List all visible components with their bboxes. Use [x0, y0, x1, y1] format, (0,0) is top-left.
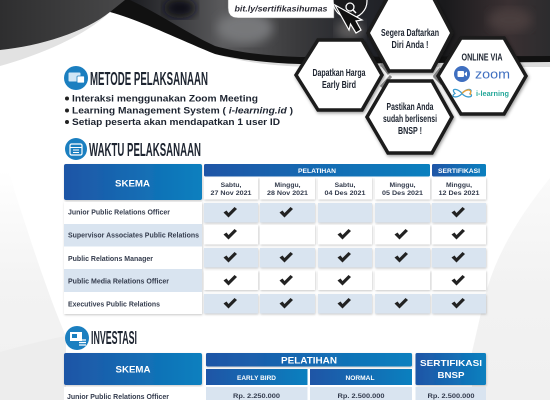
- icon: magnifier and cursor: [333, 0, 367, 33]
- price row: Rp. 2.250.000: [233, 393, 280, 400]
- hexagon: Early Bird: Dapatkan Harga: [312, 67, 366, 79]
- normal header: [310, 369, 412, 385]
- skema column: Public Relations Manager: [68, 256, 153, 263]
- skema column: [64, 164, 202, 314]
- pelatihan header: PELATIHAN: [281, 356, 337, 366]
- date cells: Minggu,: [389, 182, 416, 189]
- date cells: 28 Nov 2021: [267, 190, 308, 197]
- date cells: 12 Des 2021: [438, 190, 480, 197]
- date cells: Sabtu,: [221, 182, 241, 189]
- date cells: Minggu,: [446, 182, 472, 189]
- background: light grey shapes: [0, 170, 550, 400]
- icon: investment screen: [65, 326, 89, 350]
- hexagon: online via: [438, 38, 526, 114]
- hexagon: BNSP: sudah berlisensi: [383, 113, 437, 125]
- hexagon: Early Bird: [296, 40, 382, 110]
- bullet list: Interaksi menggunakan Zoom Meeting: [72, 94, 258, 104]
- normal header: NORMAL: [346, 375, 375, 382]
- pelatihan header: PELATIHAN: [298, 168, 336, 175]
- pelatihan header: [204, 164, 430, 176]
- hexagon: Segera Daftarkan: [368, 0, 452, 71]
- hexagon: BNSP: [367, 81, 452, 153]
- hexagon: BNSP: Pastikan Anda: [386, 101, 434, 113]
- date cells: 04 Des 2021: [324, 190, 366, 197]
- hexagon: BNSP: BNSP !: [398, 125, 422, 137]
- heading: waktu pelaksanaan: WAKTU PELAKSANAAN: [89, 140, 201, 160]
- heading: investasi: [65, 326, 137, 350]
- early bird header: EARLY BIRD: [237, 375, 276, 382]
- skema column: Supervisor Associates Public Relations: [68, 232, 199, 240]
- skema column: Executives Public Relations: [68, 302, 160, 308]
- skema header: [64, 353, 202, 385]
- heading: metode pelaksanaan: METODE PELAKSANAAN: [90, 69, 208, 89]
- bullet list: [65, 94, 293, 128]
- check marks: [224, 207, 465, 308]
- icon: zoom logo: zoom: [475, 66, 510, 82]
- text: INVESTASI: [91, 328, 137, 348]
- heading: waktu pelaksanaan: [65, 138, 201, 160]
- sertifikasi bnsp header: BNSP: [438, 370, 465, 380]
- skema column: Public Media Relations Officer: [68, 278, 169, 286]
- hexagon: Early Bird: Early Bird: [322, 79, 356, 91]
- icon: monitor: [64, 66, 88, 90]
- header band: photo and dark curves: [0, 0, 550, 67]
- date cells: 05 Des 2021: [382, 190, 423, 197]
- heading: metode pelaksanaan: [64, 66, 208, 90]
- price row: Rp. 2.500.000: [338, 393, 385, 400]
- price row: [64, 387, 486, 400]
- icon: calendar: [65, 138, 87, 160]
- skema column: SKEMA: [115, 178, 150, 190]
- pelatihan header: [206, 353, 412, 366]
- hexagon: online via: ONLINE VIA: [462, 52, 503, 64]
- connector lines between hexagons: [381, 64, 442, 87]
- schedule cells: [204, 203, 486, 314]
- sertifikasi header: SERTIFIKASI: [438, 168, 480, 175]
- hexagon: Segera Daftarkan: Segera Daftarkan: [381, 27, 439, 39]
- date cells: Minggu,: [274, 182, 301, 189]
- url pill: [228, 0, 334, 18]
- url pill: bit.ly/sertifikasihumas: [234, 4, 328, 14]
- date cells: [204, 178, 486, 200]
- schedule table: [64, 164, 486, 314]
- early bird header: [206, 369, 308, 385]
- skema column: Junior Public Relations Officer: [68, 210, 170, 216]
- sertifikasi bnsp header: SERTIFIKASI: [420, 358, 482, 368]
- bullet list: Learning Management System ( i-learning.id ): [72, 106, 293, 116]
- sertifikasi header: [432, 164, 486, 176]
- date cells: 27 Nov 2021: [210, 190, 252, 197]
- icon: i-learning logo: i-learning: [476, 91, 509, 98]
- date cells: Sabtu,: [335, 182, 355, 189]
- sertifikasi bnsp header: [416, 353, 486, 385]
- hexagon: Segera Daftarkan: Diri Anda !: [392, 39, 428, 51]
- price row: Rp. 2.500.000: [428, 393, 475, 400]
- bullet list: Setiap peserta akan mendapatkan 1 user ID: [72, 117, 280, 128]
- skema header: SKEMA: [116, 364, 151, 376]
- price table: [64, 353, 486, 400]
